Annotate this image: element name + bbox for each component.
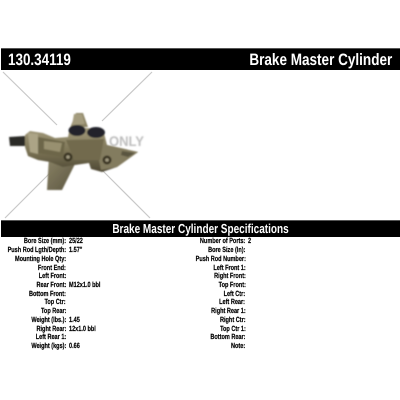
specifications heading: Brake Master Cylinder Specifications [112,221,289,236]
specifications right column: Number of Ports: [200,236,246,245]
specifications left column: Weight (lbs.): [31,315,66,324]
specifications right column: Push Rod Number: [195,254,246,263]
specifications left column: Mounting Hole Qty: [15,254,66,263]
specifications right column: Top Front: [218,280,246,289]
text: 1.45 [68,315,79,324]
header title: Brake Master Cylinder [249,51,392,69]
specifications left column [7,236,100,350]
specifications left column: Push Rod Lgth/Depth: [7,245,66,254]
specifications left column: Front End: [38,263,66,272]
specifications right column: Right Front: [214,271,246,280]
specifications right column: Top Ctr 1: [220,324,246,333]
specifications left column: Bottom Front: [29,289,66,298]
product illustration: brake master cylinder with reference lines: ONLY [109,133,145,149]
text: 25/22 [68,236,82,245]
text: 0.66 [68,341,79,350]
text: 1.57" [68,245,82,254]
product illustration: brake master cylinder with reference lines [2,72,152,218]
specifications left column: Left Rear 1: [35,332,66,341]
specifications left column: Rear Front: [36,280,66,289]
specifications left column: Right Rear: [36,324,66,333]
specifications left column: Bore Size (mm): [24,236,66,245]
specifications right column: Left Ctr: [224,289,246,298]
header bar [1,48,400,70]
specifications right column [195,236,251,350]
text: 12x1.0 bbl [68,324,95,333]
specifications right column: Left Front 1: [213,263,246,272]
text: 2 [248,236,251,245]
specifications right column: Note: [231,341,246,350]
specifications right column: Right Rear 1: [211,306,246,315]
specifications left column: Top Ctr: [45,297,66,306]
specifications bar [1,220,400,237]
specifications right column: Bore Size (In): [208,245,246,254]
text: M12x1.0 bbl [68,280,100,289]
specifications right column: Bottom Rear: [210,332,246,341]
specifications left column: Left Front: [38,271,66,280]
specifications left column: Top Rear: [41,306,66,315]
specifications left column: Weight (kgs): [31,341,66,350]
specifications right column: Right Ctr: [220,315,246,324]
part number: 130.34119 [8,51,71,69]
specifications right column: Left Rear: [220,297,246,306]
